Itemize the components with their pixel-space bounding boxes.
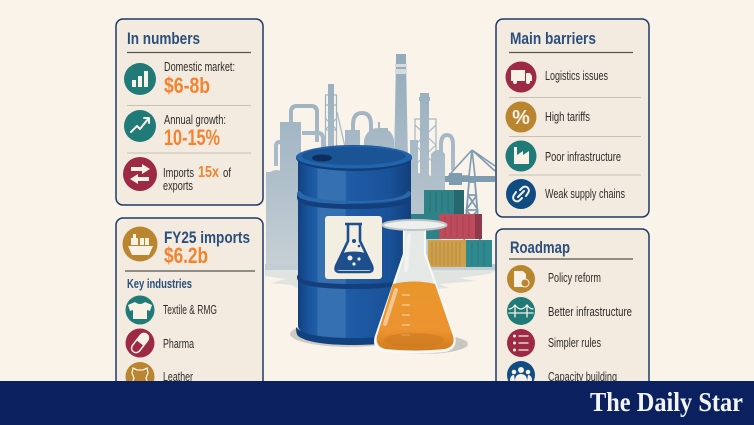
barrel label with flask icon xyxy=(325,216,382,279)
icon: people xyxy=(507,361,535,389)
stat: imports vs exports xyxy=(163,164,231,193)
panel: main barriers xyxy=(496,19,649,217)
label: weak supply chains: Weak supply chains xyxy=(545,187,625,201)
stat: domestic market xyxy=(164,60,235,98)
stat: imports vs exports: exports xyxy=(163,179,193,193)
illustration: shipping containers xyxy=(411,190,492,267)
icon: policy document xyxy=(507,265,535,293)
subheading: key industries: Key industries xyxy=(127,276,192,291)
icon: growth arrow xyxy=(124,110,156,142)
panel: roadmap xyxy=(496,229,649,399)
icon: leather hide xyxy=(126,362,154,391)
illustration: oil barrel xyxy=(290,145,412,347)
stat: imports vs exports: Imports xyxy=(163,166,194,180)
heading: FY25 imports: FY25 imports xyxy=(164,229,250,247)
icon: checklist xyxy=(507,329,535,357)
label: logistics: Logistics issues xyxy=(545,69,608,83)
label: capacity building: Capacity building xyxy=(548,370,617,384)
illustration: glass flask with orange liquid xyxy=(375,220,468,354)
heading: FY25 imports xyxy=(164,229,250,268)
illustration: crane xyxy=(445,150,495,242)
stat: annual growth: Annual growth: xyxy=(164,113,226,127)
heading: roadmap: Roadmap xyxy=(510,239,570,257)
label: poor infrastructure: Poor infrastructure xyxy=(545,150,621,164)
stat: domestic market: Domestic market: xyxy=(164,60,235,74)
stat: annual growth: 10-15% xyxy=(164,125,220,150)
stat: annual growth xyxy=(164,113,226,150)
icon: percent: % xyxy=(512,107,530,129)
stat: imports vs exports: of xyxy=(223,166,231,180)
label: textile: Textile & RMG xyxy=(163,303,217,317)
icon: bar chart xyxy=(124,63,156,95)
icon: t-shirt xyxy=(126,296,154,324)
icon: percent xyxy=(506,102,536,132)
label: pharma: Pharma xyxy=(163,337,194,351)
panel: in numbers xyxy=(116,19,263,205)
icon: chain link xyxy=(506,179,536,209)
label: tariffs: High tariffs xyxy=(545,110,590,124)
heading: in numbers: In numbers xyxy=(127,30,200,48)
illustration: industrial skyline xyxy=(265,54,497,290)
stat: imports vs exports: 15x xyxy=(198,164,219,181)
icon: factory xyxy=(506,140,536,172)
heading: FY25 imports: $6.2b xyxy=(164,243,208,268)
icon: cargo ship xyxy=(122,226,158,262)
footer band xyxy=(0,381,754,425)
panel: FY25 imports xyxy=(116,218,263,398)
label: simpler rules: Simpler rules xyxy=(548,336,601,350)
label: policy reform: Policy reform xyxy=(548,271,601,285)
stat: domestic market: $6-8b xyxy=(164,73,210,98)
label: leather: Leather xyxy=(163,370,193,384)
heading: main barriers: Main barriers xyxy=(510,30,596,48)
icon: pill xyxy=(126,328,154,358)
icon: truck xyxy=(506,62,536,92)
icon: exchange arrows xyxy=(123,157,157,191)
label: better infrastructure: Better infrastructure xyxy=(548,305,632,319)
icon: bridge xyxy=(507,297,535,325)
